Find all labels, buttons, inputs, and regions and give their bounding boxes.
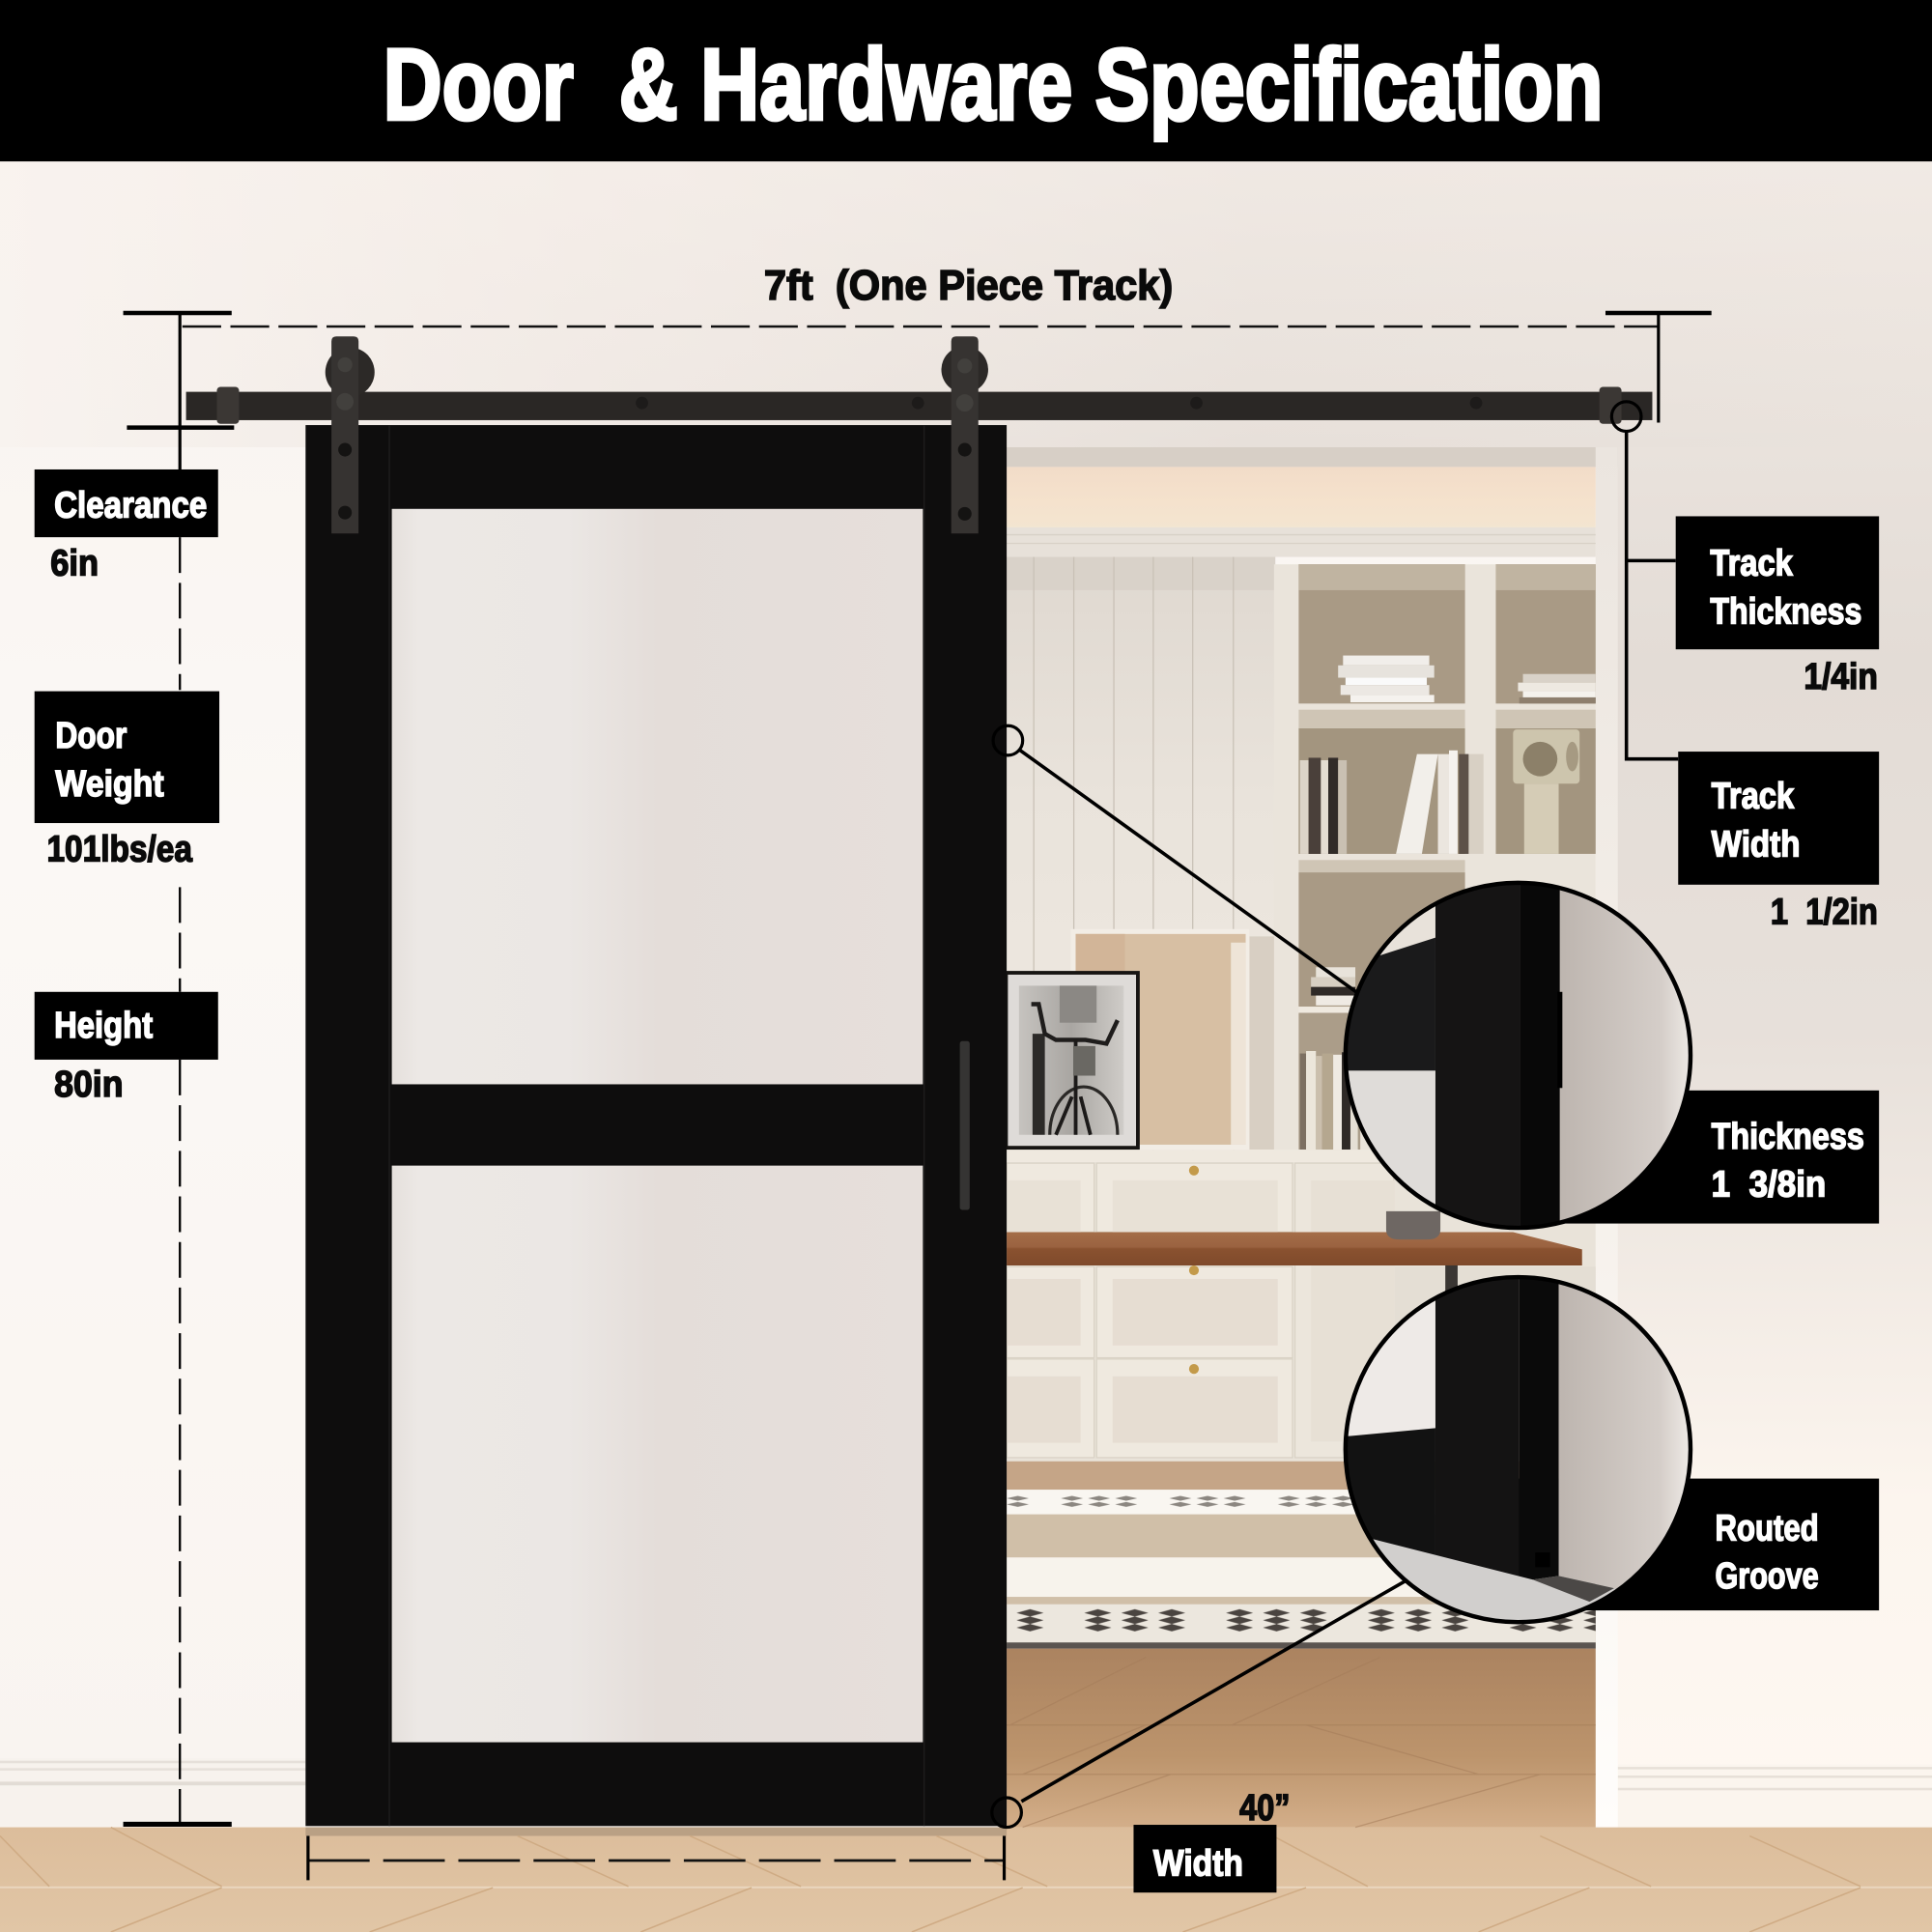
back floor xyxy=(1007,1462,1596,1491)
track fasteners xyxy=(636,397,1482,409)
left hanger xyxy=(326,336,375,533)
door slab xyxy=(305,425,1007,1826)
sculpture xyxy=(1513,729,1579,854)
rug xyxy=(1007,1490,1596,1649)
baseboards xyxy=(0,1758,1932,1828)
label: track thickness xyxy=(1676,516,1879,697)
label text: door thickness xyxy=(1712,1116,1864,1206)
label: height: Height xyxy=(54,1005,153,1046)
label: track width: 1 1/2in xyxy=(1771,892,1878,933)
track stoppers xyxy=(216,387,1622,424)
label: width xyxy=(1133,1787,1290,1892)
interior floor xyxy=(1007,1649,1596,1828)
lower shelf books xyxy=(1298,967,1360,1150)
doorway room interior xyxy=(1005,447,1618,1828)
label: routed groove box xyxy=(1518,1479,1879,1610)
panel wall xyxy=(1007,557,1275,1153)
label: track thickness: Track xyxy=(1710,543,1793,584)
zoom circle: routed groove detail xyxy=(1343,1275,1694,1633)
label: clearance: 6in xyxy=(50,543,99,584)
door frame trim xyxy=(1007,447,1618,1828)
beige art print xyxy=(1070,929,1249,1150)
label text: door thickness: Thickness xyxy=(1712,1116,1864,1157)
right hanger xyxy=(941,336,988,533)
bookshelf xyxy=(1007,564,1596,1162)
label text: door thickness: 1 3/8in xyxy=(1712,1164,1826,1206)
dining table xyxy=(1007,1233,1582,1302)
bottom glass panel xyxy=(392,1166,923,1743)
top glass panel xyxy=(392,509,923,1084)
crown moulding xyxy=(1007,527,1596,557)
label: clearance: Clearance xyxy=(54,485,207,526)
height dimension line xyxy=(124,313,232,1824)
label: door weight: Weight xyxy=(55,763,164,805)
zoom circle: door thickness detail xyxy=(1343,881,1695,1233)
label: track width xyxy=(1678,752,1879,933)
label: track thickness: 1/4in xyxy=(1804,656,1878,697)
track marker circle and bracket xyxy=(1611,402,1678,759)
title: Door & Hardware Specification xyxy=(384,29,1603,142)
label: width: Width xyxy=(1153,1842,1243,1884)
cabinets xyxy=(1007,1162,1596,1463)
track bar xyxy=(186,392,1652,420)
label: track width: Width xyxy=(1712,823,1801,865)
label: track thickness: Thickness xyxy=(1710,590,1861,632)
unit shadow right of art xyxy=(1249,936,1274,1150)
shelf books xyxy=(1300,656,1596,854)
floor xyxy=(0,1828,1932,1932)
label: track width: Track xyxy=(1712,776,1795,817)
label: width: 40” xyxy=(1239,1787,1290,1829)
width dimension line xyxy=(308,1836,1005,1880)
track length label: 7ft (One Piece Track) xyxy=(764,263,1173,309)
sliding track and hardware xyxy=(186,336,1652,533)
barn door xyxy=(305,425,1007,1826)
title banner xyxy=(0,0,1932,161)
label: door weight: 101lbs/ea xyxy=(46,829,193,870)
label: clearance xyxy=(35,469,218,584)
cup xyxy=(1386,1211,1440,1239)
ledge xyxy=(1007,1150,1395,1162)
ceiling glow xyxy=(1007,467,1596,527)
label: height: 80in xyxy=(54,1064,124,1105)
door handle xyxy=(960,1041,970,1210)
stile seams xyxy=(389,425,924,1826)
track length dimension xyxy=(124,263,1712,428)
label: door weight: Door xyxy=(55,715,127,756)
label: door thickness box xyxy=(1516,1091,1879,1224)
callout markers and leader lines xyxy=(992,725,1412,1828)
label text: routed groove: Routed xyxy=(1716,1507,1819,1548)
label: door weight xyxy=(35,692,219,870)
label text: routed groove xyxy=(1716,1507,1819,1597)
label: height xyxy=(35,992,218,1105)
label text: routed groove: Groove xyxy=(1716,1555,1819,1597)
framed bicycle photo xyxy=(1005,971,1140,1150)
